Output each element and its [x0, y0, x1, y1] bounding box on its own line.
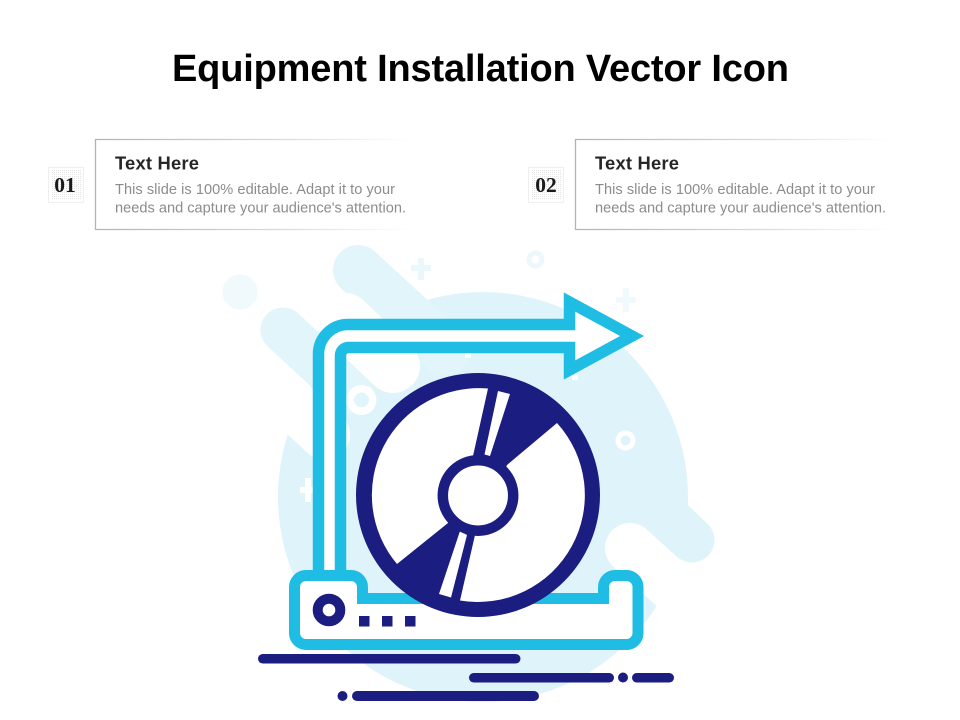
disc white sector upper left — [372, 388, 488, 564]
tray indicator squares — [359, 616, 416, 626]
card outline 01 — [96, 140, 410, 230]
card body 01: This slide is 100% editable. Adapt it to your — [115, 182, 395, 198]
icon: compact disc — [356, 373, 600, 617]
panel: item 02 — [528, 140, 890, 230]
disc highlight upper — [484, 391, 510, 456]
card heading 01: Text Here — [115, 152, 199, 174]
card body 01 — [115, 182, 406, 216]
tray power button — [318, 599, 340, 621]
icon: installation arrow — [318, 302, 632, 572]
title: Equipment Installation Vector Icon — [172, 48, 789, 90]
card body 02 — [595, 182, 886, 216]
card body 02: This slide is 100% editable. Adapt it to your — [595, 182, 875, 198]
number badge 02 — [528, 168, 564, 202]
card outline 02 — [576, 140, 890, 230]
card body 01: needs and capture your audience's attention. — [115, 200, 406, 216]
disc highlight lower — [439, 531, 467, 598]
background blob decoration — [222, 253, 720, 702]
speed lines — [258, 654, 674, 701]
icon: disc drive tray — [294, 576, 638, 644]
number badge 01 — [48, 168, 84, 202]
number badge 01: 01 — [54, 173, 76, 197]
disc hub — [443, 460, 513, 531]
card body 02: needs and capture your audience's attention. — [595, 200, 886, 216]
disc white sector lower right — [460, 423, 585, 602]
panel: item 01 — [48, 140, 410, 230]
card heading 02: Text Here — [595, 152, 679, 174]
number badge 02: 02 — [535, 173, 557, 197]
